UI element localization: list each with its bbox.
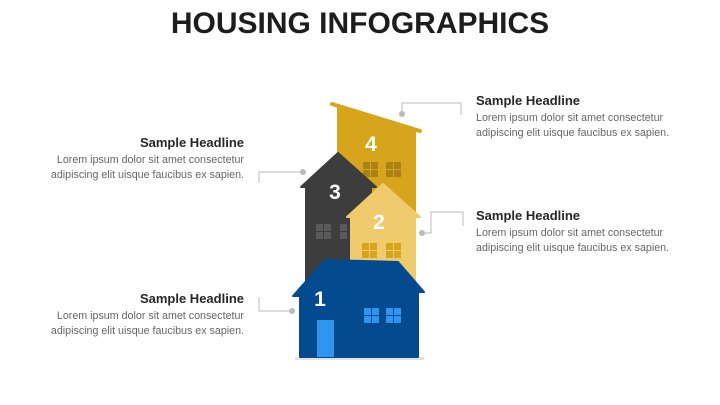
text: headline 2 [476,208,669,254]
house 3: 3 [329,181,341,204]
title: HOUSING INFOGRAPHICS [171,7,549,40]
text: headline 4 [476,93,669,139]
text: headline 2: Lorem ipsum dolor sit amet consectetur adipiscing elit uisque faucibus ex sapien. [476,227,669,254]
house 4: 4 [365,133,377,156]
text: headline 1: Sample Headline [140,291,244,306]
house 4 [332,104,420,300]
house 1: 1 [314,288,326,311]
text: headline 3 [51,135,244,181]
connectors [259,103,463,311]
text: headline 4: Lorem ipsum dolor sit amet consectetur adipiscing elit uisque faucibus ex sapien. [476,112,669,139]
text: headline 2: Sample Headline [476,208,580,223]
text: headline 3: Lorem ipsum dolor sit amet consectetur adipiscing elit uisque faucibus ex sapien. [51,154,244,181]
text: headline 1 [51,291,244,337]
house 3 [301,153,376,300]
house 2: 2 [373,211,385,234]
text: headline 4: Sample Headline [476,93,580,108]
house 1 [293,260,424,360]
text: headline 3: Sample Headline [140,135,244,150]
text: headline 1: Lorem ipsum dolor sit amet consectetur adipiscing elit uisque faucibus ex sapien. [51,310,244,337]
house 2 [347,184,420,300]
